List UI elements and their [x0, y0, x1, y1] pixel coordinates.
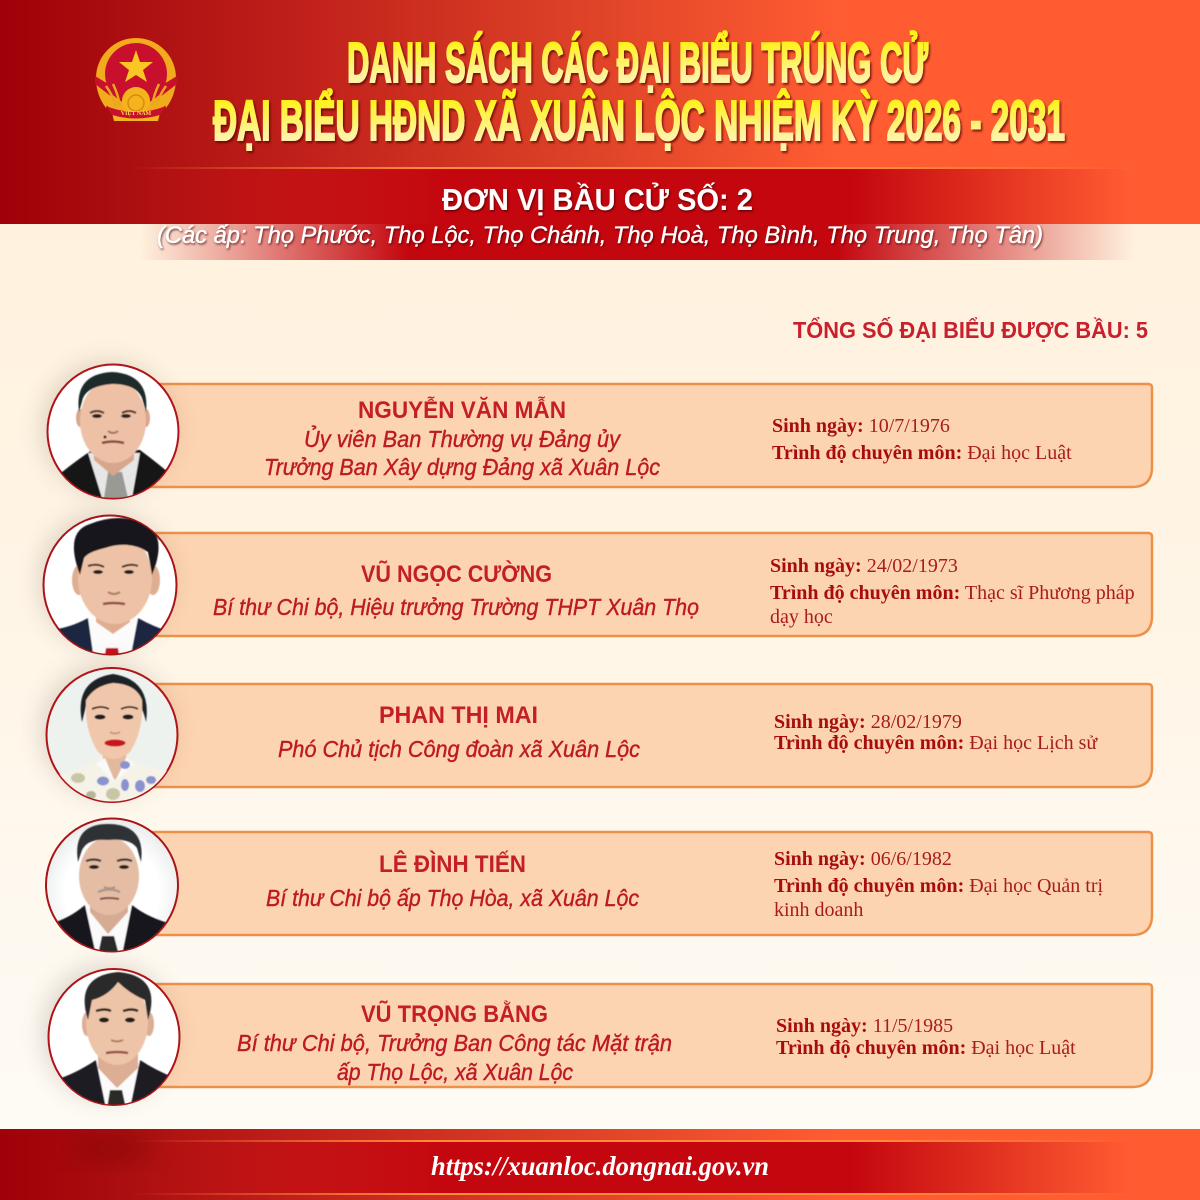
details — [776, 1015, 1076, 1059]
details: kinh doanh — [774, 899, 863, 921]
details: Trình độ chuyên môn: Đại học Luật — [772, 442, 1072, 464]
role — [264, 424, 660, 480]
name: LÊ ĐÌNH TIẾN — [379, 850, 526, 878]
details: Sinh ngày: 10/7/1976 — [772, 415, 950, 437]
total delegates: TỔNG SỐ ĐẠI BIỂU ĐƯỢC BẦU: 5 — [793, 316, 1148, 343]
details: Trình độ chuyên môn: Đại học Luật — [776, 1037, 1076, 1059]
details: Trình độ chuyên môn: Đại học Lịch sử — [774, 732, 1098, 754]
details — [772, 415, 1072, 464]
portrait: Nguyễn Văn Mẫn — [42, 362, 178, 500]
details — [770, 555, 1135, 628]
role: Trưởng Ban Xây dựng Đảng xã Xuân Lộc — [264, 454, 660, 480]
title — [213, 30, 1065, 153]
name: PHAN THỊ MAI — [379, 702, 538, 729]
header banner — [0, 0, 1200, 260]
panel: delegate 1 — [42, 362, 1152, 500]
details — [774, 711, 1098, 754]
name: VŨ TRỌNG BẰNG — [361, 1000, 548, 1028]
name: NGUYỄN VĂN MẪN — [358, 395, 566, 424]
subheading: hamlets: (Các ấp: Thọ Phước, Thọ Lộc, Thọ Chánh, Thọ Hoà, Thọ Bình, Thọ Trung, Thọ Tân) — [157, 222, 1043, 249]
subheading: constituency: ĐƠN VỊ BẦU CỬ SỐ: 2 — [442, 181, 753, 217]
portrait: Vũ Ngọc Cường — [39, 512, 176, 660]
details: dạy học — [770, 606, 833, 628]
details — [774, 848, 1104, 921]
role — [237, 1030, 672, 1085]
role: Bí thư Chi bộ, Hiệu trưởng Trường THPT Xuân Thọ — [213, 594, 699, 620]
portrait: Vũ Trọng Bằng — [42, 964, 180, 1108]
icon: national emblem: VIỆT NAM — [121, 109, 152, 117]
details: Sinh ngày: 11/5/1985 — [776, 1015, 953, 1037]
details: Trình độ chuyên môn: Đại học Quản trị — [774, 875, 1104, 897]
portrait: Phan Thị Mai — [41, 664, 180, 805]
name: VŨ NGỌC CƯỜNG — [361, 560, 552, 588]
panel: delegate 2 — [39, 512, 1152, 660]
icon: national emblem — [95, 38, 177, 121]
panel: delegate 4 — [46, 818, 1152, 955]
details: Sinh ngày: 24/02/1973 — [770, 555, 958, 577]
website link: https://xuanloc.dongnai.gov.vn — [431, 1151, 769, 1181]
panel: delegate 3 — [41, 664, 1152, 805]
role: Bí thư Chi bộ, Trưởng Ban Công tác Mặt trận — [237, 1030, 672, 1056]
panel: delegate 5 — [42, 964, 1152, 1108]
details: Sinh ngày: 06/6/1982 — [774, 848, 952, 870]
portrait: Lê Đình Tiến — [46, 818, 178, 955]
footer banner — [0, 1129, 1200, 1200]
role: Phó Chủ tịch Công đoàn xã Xuân Lộc — [278, 736, 640, 762]
details: Trình độ chuyên môn: Thạc sĩ Phương pháp — [770, 582, 1135, 604]
role: Ủy viên Ban Thường vụ Đảng ủy — [304, 424, 621, 452]
role: ấp Thọ Lộc, xã Xuân Lộc — [337, 1059, 573, 1085]
role: Bí thư Chi bộ ấp Thọ Hòa, xã Xuân Lộc — [266, 885, 639, 911]
details: Sinh ngày: 28/02/1979 — [774, 711, 962, 733]
